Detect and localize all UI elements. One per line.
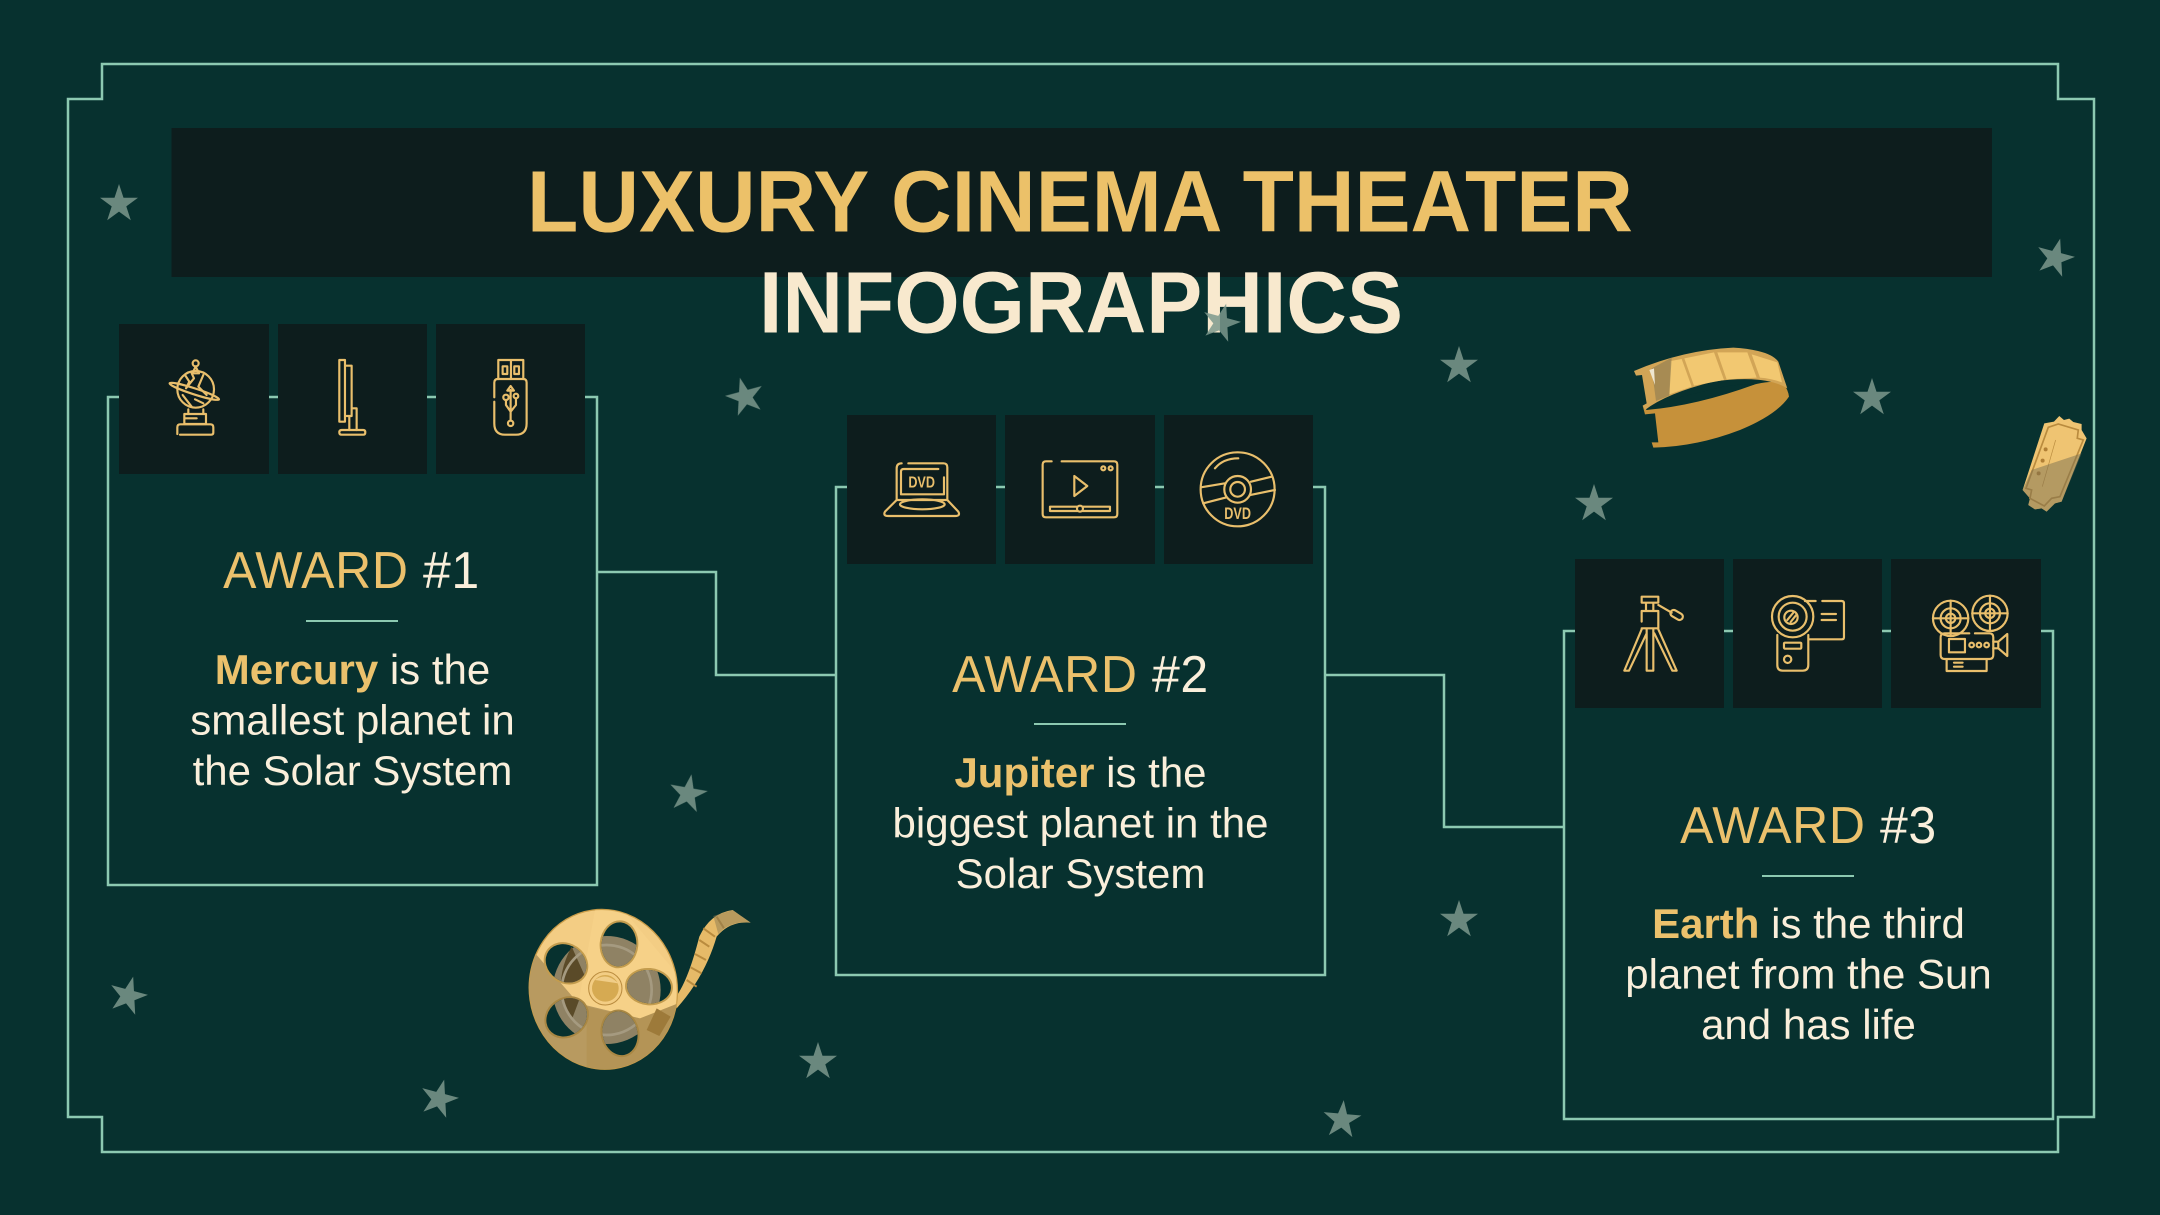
heading: award 2: AWARD #2 xyxy=(952,645,1209,703)
text: award 2 description: Jupiter is the xyxy=(954,749,1207,796)
illustration: film reel xyxy=(528,908,750,1070)
text: award 2 description: biggest planet in the xyxy=(893,800,1268,846)
text: award 3 description: and has life xyxy=(1701,1001,1916,1048)
title: INFOGRAPHICS xyxy=(759,254,1403,352)
icon: dvd disc: DVD xyxy=(1224,504,1251,523)
text: award 1 description: Mercury is the xyxy=(215,646,490,693)
text: award 2 description: Solar System xyxy=(956,850,1205,897)
text: award 3 description: planet from the Sun xyxy=(1625,950,1992,998)
decorative stars xyxy=(100,184,2079,1138)
icon: globe trophy xyxy=(169,360,220,435)
title: LUXURY CINEMA THEATER xyxy=(527,153,1633,251)
panel: award 2 xyxy=(836,415,1325,975)
illustration: film strip band xyxy=(1634,348,1789,448)
heading: award 1: AWARD #1 xyxy=(223,541,480,599)
icon: side monitor xyxy=(339,360,365,435)
icon: video player xyxy=(1043,461,1117,517)
icon: dvd disc xyxy=(1201,452,1275,526)
icon: camcorder xyxy=(1772,596,1844,671)
panel: award 1 xyxy=(108,324,597,885)
connector: award 1 to award 2 xyxy=(597,572,836,675)
icon: dvd laptop: DVD xyxy=(908,474,935,491)
icon: tripod xyxy=(1624,597,1684,671)
heading: award 3: AWARD #3 xyxy=(1680,796,1937,854)
title xyxy=(527,153,1633,352)
text: award 3 description: Earth is the third xyxy=(1652,900,1965,947)
text: award 1 description: smallest planet in xyxy=(190,696,515,744)
icon: usb drive xyxy=(494,360,527,435)
illustration: golden ticket xyxy=(2023,416,2087,512)
icon: film projector xyxy=(1933,596,2008,671)
text: award 1 description: the Solar System xyxy=(193,747,512,794)
icon: dvd laptop xyxy=(884,463,959,516)
panel: award 3 xyxy=(1564,559,2053,1119)
connector: award 2 to award 3 xyxy=(1325,675,1564,827)
title banner xyxy=(172,128,1992,277)
